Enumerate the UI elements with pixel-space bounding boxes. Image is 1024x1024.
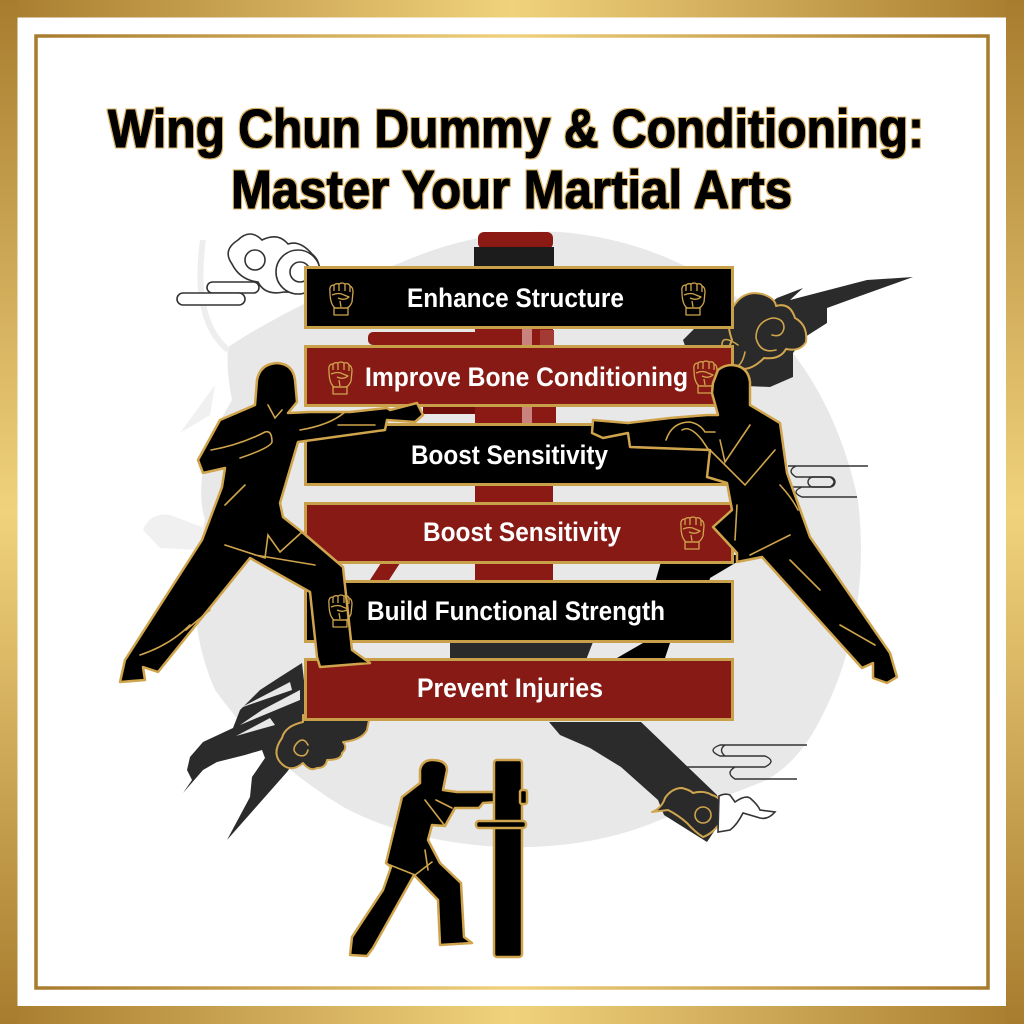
panel: build functional strength [306, 582, 732, 642]
left fighter [120, 363, 423, 682]
cloud lines: bottom right [687, 745, 807, 779]
ink stroke: top right [683, 277, 913, 387]
right fighter [592, 365, 897, 683]
cloud: bottom right [652, 788, 723, 837]
panel: prevent injuries [306, 660, 732, 720]
icon: fist left [329, 362, 352, 394]
panel: boost sensitivity red [306, 504, 732, 562]
outlined cloud: top left [177, 234, 320, 305]
panel: boost sensitivity black [306, 424, 732, 484]
title: Master Your Martial Arts [231, 160, 792, 220]
grey ink circle [143, 232, 861, 847]
panel: improve bone conditioning: Improve Bone Conditioning [365, 362, 688, 392]
cloud: bottom left [276, 715, 370, 769]
title [108, 99, 924, 220]
ink stroke: bottom right [549, 722, 725, 842]
cloud lines: right [788, 466, 868, 497]
wooden dummy [368, 232, 593, 660]
outlined cloud: bottom right [718, 794, 775, 832]
panel: enhance structure: Enhance Structure [407, 283, 624, 313]
icon: fist left [330, 283, 353, 315]
title: Wing Chun Dummy & Conditioning: [108, 99, 924, 159]
panel: boost sensitivity red: Boost Sensitivity [423, 517, 621, 547]
panel: boost sensitivity black: Boost Sensitivity [411, 440, 608, 470]
panel: prevent injuries: Prevent Injuries [417, 673, 603, 703]
ink stroke: bottom left [183, 663, 320, 840]
icon: fist on left leg [329, 595, 352, 627]
cloud: top right [717, 293, 806, 369]
panel: improve bone conditioning [306, 346, 732, 406]
right fighter: front leg [617, 555, 737, 658]
icon: fist right [682, 283, 705, 315]
icon: fist right [694, 361, 717, 393]
icon: fist right [681, 517, 704, 549]
panel: build functional strength: Build Functional Strength [367, 596, 665, 626]
panel: enhance structure [306, 268, 732, 328]
small figure training [350, 760, 498, 956]
small wooden dummy [476, 760, 527, 957]
